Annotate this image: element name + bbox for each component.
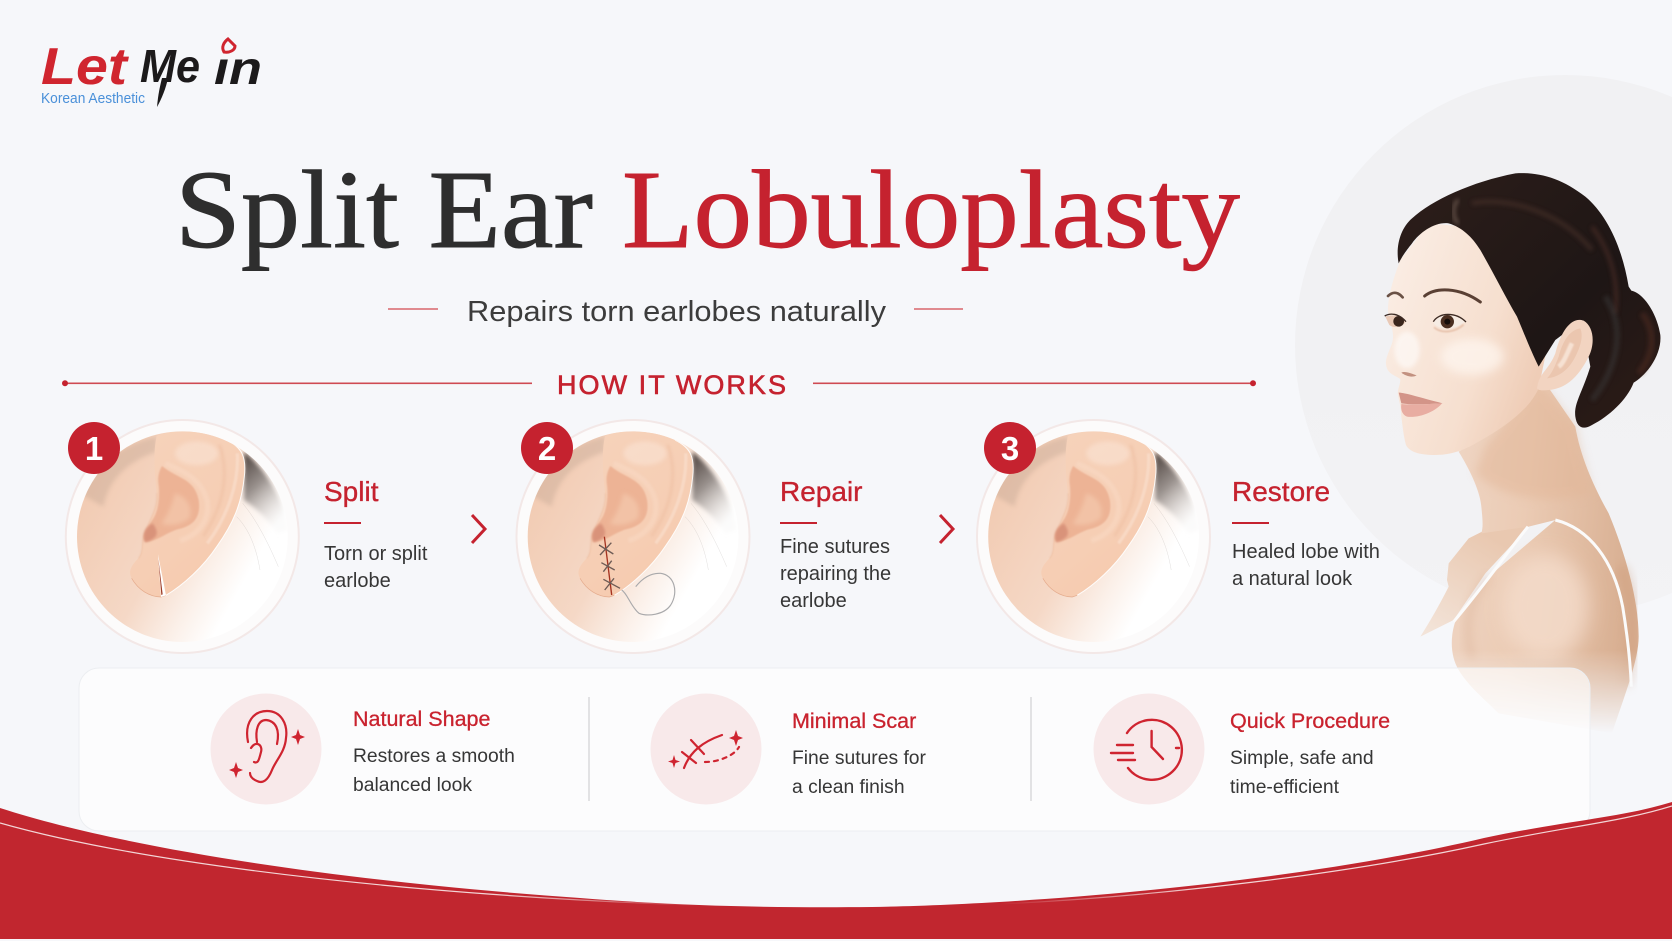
step 2 text: repairing the: [780, 563, 891, 585]
arrow: step 1 to 2: [472, 515, 485, 543]
benefit: quick procedure: [1094, 694, 1390, 804]
step 2 text: Repair: [780, 476, 862, 507]
step 3 text: Restore: [1232, 476, 1330, 507]
quick procedure text: time-efficient: [1230, 777, 1340, 798]
minimal scar text: Minimal Scar: [792, 709, 916, 733]
divider 1: [588, 697, 590, 801]
logo: Let Me in: Me: [140, 40, 200, 92]
step 1 text: [324, 476, 428, 592]
step 1 ear photo: [66, 420, 299, 653]
logo: Let Me in: ın: [214, 42, 262, 94]
step 3 ear photo: [977, 420, 1210, 653]
bottom red wave band: [0, 802, 1672, 939]
step 3 text: a natural look: [1232, 568, 1353, 590]
hair: [1398, 173, 1660, 428]
minimal scar text: Fine sutures for: [792, 748, 927, 769]
step 1: split: [66, 420, 428, 653]
face: [1386, 223, 1549, 455]
natural shape text: Natural Shape: [353, 707, 490, 731]
subtitle with side rules: Repairs torn earlobes naturally: [467, 296, 887, 328]
quick procedure text: Simple, safe and: [1230, 748, 1374, 769]
title: [175, 149, 1241, 272]
facial features: [1385, 290, 1480, 417]
icon: sutured scar: [650, 694, 762, 804]
step 2 ear photo with sutures: [516, 420, 750, 653]
icon: ear with sparkles: [210, 694, 322, 804]
step 2: repair: [516, 420, 891, 653]
step 2 badge: [521, 422, 573, 474]
step 2 text: earlobe: [780, 590, 847, 612]
icon: clock with speed lines: [1094, 694, 1204, 804]
background circle behind portrait: [1295, 75, 1672, 615]
step 3 badge: [984, 422, 1036, 474]
dress straps: [1454, 527, 1528, 622]
step 1 badge: 1: [85, 430, 103, 467]
step 2 badge: 2: [538, 430, 556, 467]
benefit: natural shape: [210, 694, 515, 804]
how it works heading with rules: [62, 370, 1256, 400]
portrait: woman in profile: [1385, 173, 1660, 733]
minimal scar text: a clean finish: [792, 777, 905, 798]
quick procedure text: Quick Procedure: [1230, 709, 1390, 733]
divider 2: [1030, 697, 1032, 801]
step 2 text: Fine sutures: [780, 536, 890, 558]
title: Lobuloplasty: [622, 149, 1241, 272]
step 3 text: Healed lobe with: [1232, 541, 1380, 563]
chest sliver: [1420, 527, 1529, 637]
neck and shoulder: [1452, 373, 1639, 733]
natural shape text: Restores a smooth: [353, 746, 515, 767]
step 3 badge: 3: [1001, 430, 1019, 467]
quick procedure text: [1230, 709, 1390, 798]
summary card panel: [79, 668, 1590, 831]
natural shape text: [353, 707, 515, 796]
step 1 text: Split: [324, 476, 379, 507]
step 1 text: earlobe: [324, 570, 391, 592]
step 3 text: [1232, 476, 1380, 590]
natural shape text: balanced look: [353, 775, 472, 796]
step 1 badge: [68, 422, 120, 474]
step 1 text: Torn or split: [324, 543, 428, 565]
minimal scar text: [792, 709, 927, 798]
benefit: minimal scar: [650, 694, 927, 804]
logo: Let Me in: [41, 38, 262, 107]
logo tagline: Korean Aesthetic: [41, 91, 145, 107]
portrait ear: [1537, 320, 1593, 390]
step 2 text: [780, 476, 891, 612]
logo: Let Me in: Let: [41, 38, 130, 96]
title: Split Ear: [175, 149, 593, 272]
arrow: step 2 to 3: [940, 515, 953, 543]
step 3: restore: [977, 420, 1380, 653]
how it works heading with rules: HOW IT WORKS: [557, 370, 786, 400]
